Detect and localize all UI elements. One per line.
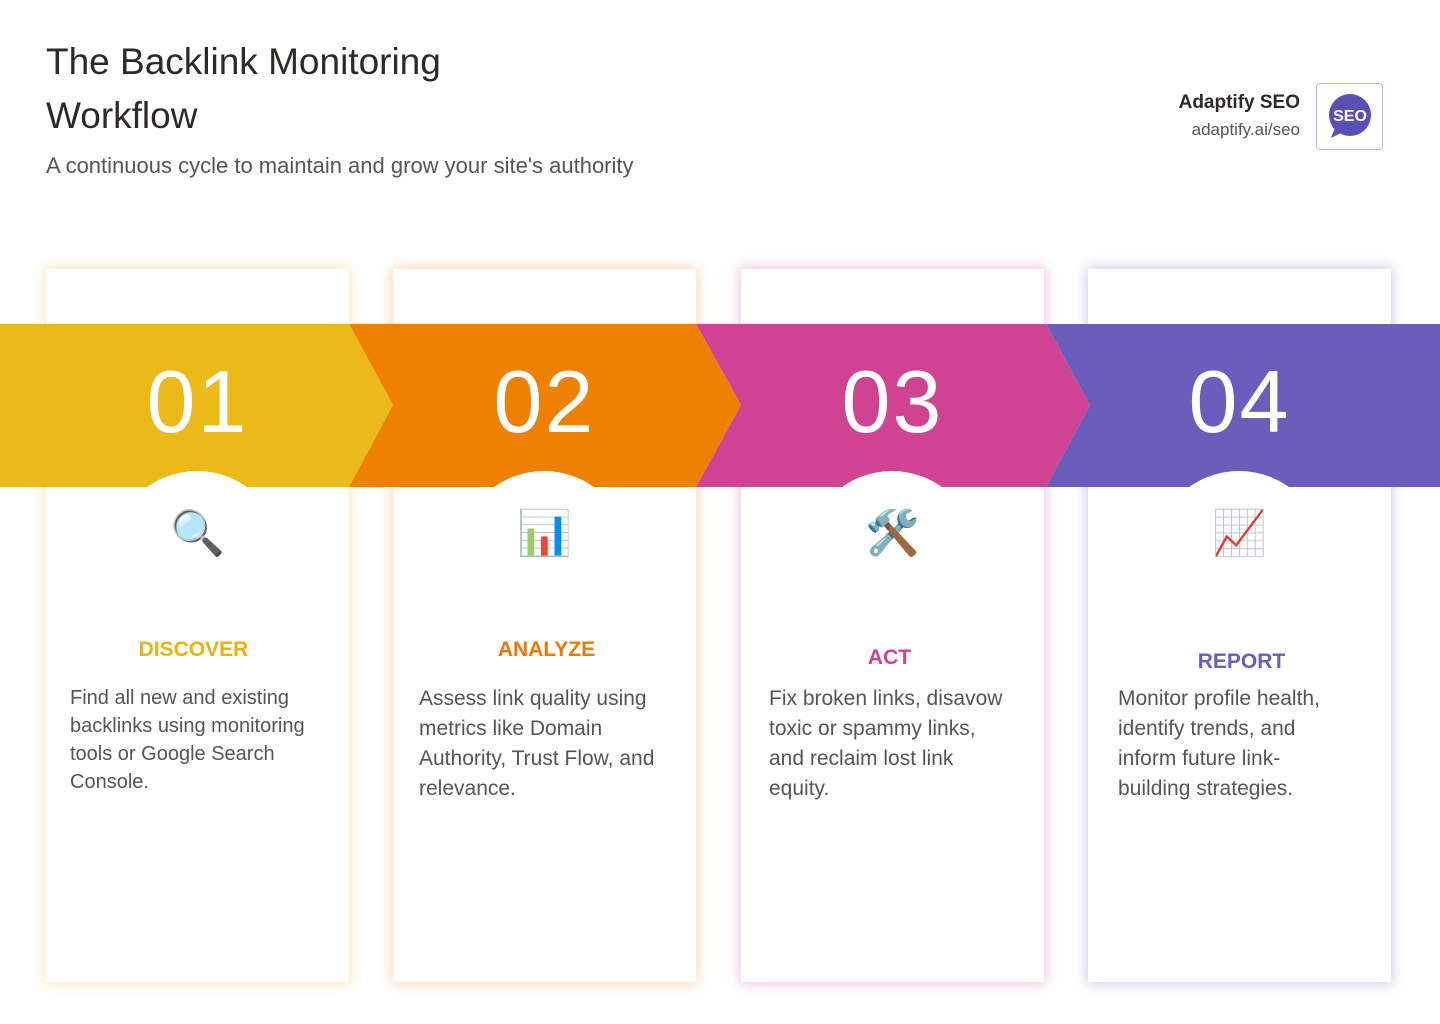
heading report: REPORT: [1198, 650, 1285, 673]
icon: SEO logo: [1316, 83, 1383, 150]
icon: bar chart: 📊: [517, 507, 572, 559]
title: Workflow: [46, 95, 197, 136]
heading discover: DISCOVER: [139, 638, 248, 661]
card 4: [1088, 269, 1391, 982]
brand: adaptify.ai/seo: [1192, 120, 1300, 139]
icon: tools: 🛠: [865, 507, 920, 559]
number 02: 02: [494, 352, 595, 451]
heading act: ACT: [868, 646, 911, 669]
card 2: [393, 269, 696, 982]
brand: [1179, 92, 1300, 139]
text report: Monitor profile health, identify trends, and inform future link-building strategies.: [1118, 687, 1320, 800]
text analyze: Assess link quality using metrics like Domain Authority, Trust Flow, and relevance.: [419, 687, 654, 800]
title: The Backlink Monitoring: [46, 41, 441, 82]
title: [46, 41, 441, 136]
text act: Fix broken links, disavow toxic or spammy links, and reclaim lost link equity.: [769, 687, 1002, 800]
chevron band: [0, 324, 1440, 487]
heading analyze: ANALYZE: [498, 638, 595, 661]
card 1: [46, 269, 349, 982]
number 03: 03: [842, 352, 943, 451]
number 04: 04: [1189, 352, 1290, 451]
brand: Adaptify SEO: [1179, 92, 1300, 113]
circles: [111, 471, 283, 643]
card 3: [741, 269, 1044, 982]
icon: magnifier: 🔍: [170, 507, 225, 559]
icon: SEO logo: SEO: [1333, 108, 1367, 125]
subtitle: A continuous cycle to maintain and grow your site's authority: [46, 153, 634, 178]
number 01: 01: [147, 352, 248, 451]
icon: trend chart: 📈: [1212, 507, 1267, 559]
text discover: Find all new and existing backlinks using monitoring tools or Google Search Console.: [70, 687, 305, 793]
